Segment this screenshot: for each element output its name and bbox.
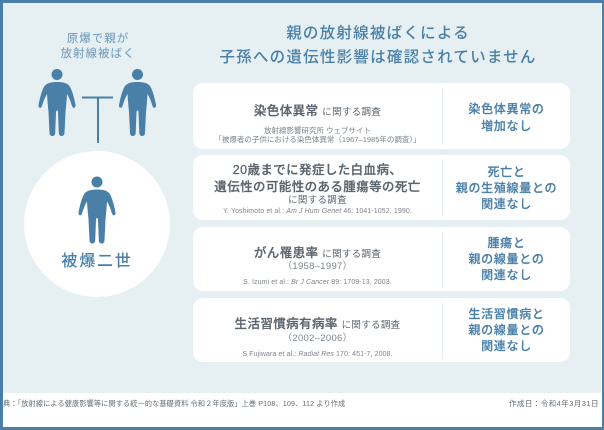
footer source: 典：「放射線による健康影響等に関する統一的な基礎資料 令和２年度版」上巻 P108、109、112 より作成 [3, 400, 345, 408]
study source: S Fujiwara et al.: Radiat Res 170: 451-7, 2008. [242, 350, 393, 358]
panel: second generation circle [24, 150, 170, 296]
study title: がん罹患率 に関する調査 [254, 246, 381, 260]
result: 関連なし [481, 339, 532, 353]
result [456, 165, 557, 211]
result [468, 236, 545, 282]
icon: child figure [78, 176, 116, 244]
result: 関連なし [481, 268, 532, 282]
study period: （1958–1997） [283, 261, 352, 272]
panel: cancer incidence study [193, 227, 570, 291]
label: second generation: 被爆二世 [61, 252, 133, 270]
panel: chromosome study [193, 83, 570, 149]
study source: 放射線影響研究所 ウェブサイト [264, 126, 371, 134]
left heading: parents exposed: 放射線被ばく [60, 48, 136, 60]
study source [214, 126, 421, 144]
icon: parents and family tree connector [38, 69, 156, 143]
study title: 染色体異常 に関する調査 [254, 104, 381, 118]
result: 生活習慣病と [468, 307, 545, 321]
result: 親の生殖線量との [456, 181, 557, 195]
panel: leukemia study [193, 155, 570, 220]
result: 関連なし [481, 197, 532, 211]
study subtitle: に関する調査 [288, 195, 347, 206]
result: 親の線量との [468, 323, 545, 337]
study title [214, 162, 421, 194]
result: 増加なし [481, 118, 532, 132]
study source: Y. Yoshimoto et al.: Am J Hum Genet 46: 1041-1052, 1990. [223, 208, 412, 214]
title: 子孫への遺伝性影響は確認されていません [219, 49, 537, 66]
study source: 「被爆者の子供における染色体異常（1967–1985年の調査）」 [214, 135, 421, 144]
left heading: parents exposed [60, 32, 136, 60]
study title: 遺伝性の可能性のある腫瘍等の死亡 [214, 180, 421, 194]
study title: 生活習慣病有病率 に関する調査 [235, 317, 400, 331]
left heading: parents exposed: 原爆で親が [67, 32, 129, 44]
panel: lifestyle disease study [193, 298, 570, 362]
study title: 20歳までに発症した白血病、 [233, 163, 402, 177]
footer date: 作成日：令和4年3月31日 [509, 399, 599, 408]
result: 死亡と [487, 165, 526, 179]
result [468, 307, 545, 353]
title: 親の放射線被ばくによる [286, 25, 470, 42]
study source: S. Izumi et al.: Br J Cancer 89: 1709-13, 2003. [243, 278, 392, 286]
result: 染色体異常の [468, 102, 545, 116]
result: 腫瘍と [487, 236, 526, 250]
result: 親の線量との [468, 252, 545, 266]
title [219, 24, 537, 66]
result [468, 102, 545, 132]
study period: （2002–2006） [283, 333, 352, 344]
